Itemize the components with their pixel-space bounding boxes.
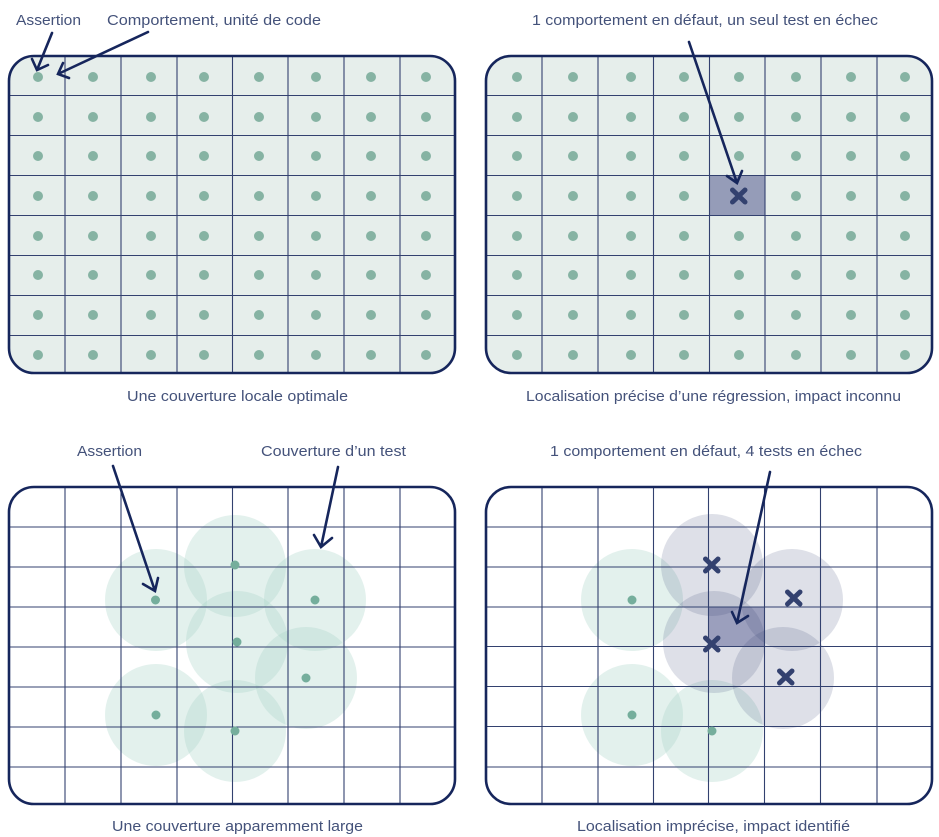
grid of code units [9,56,455,373]
failing cell highlight [710,176,765,216]
passing test circles [581,549,763,782]
failing test circles [661,514,843,729]
panel frame [486,487,932,804]
failing test crosses [706,559,800,683]
panel: localisation précise [486,12,932,405]
label: comportement: Comportement, unité de code [107,12,321,29]
panel frame [9,487,455,804]
panel: localisation imprécise [486,443,932,835]
test coverage circles [105,515,366,782]
label: assertion: Assertion [16,12,81,29]
caption: Localisation précise d’une régression, impact inconnu [526,388,901,405]
label: 4 tests en échec: 1 comportement en défaut, 4 tests en échec [550,443,863,460]
assertion dots [38,77,426,355]
panel frame [9,56,455,373]
arrow: assertion [32,33,52,70]
panel background [9,56,455,373]
grid of code units [9,487,455,804]
arrow: vers la cellule en défaut [732,472,770,623]
grid of code units [486,487,932,804]
panel background [486,56,932,373]
arrow: assertion [113,466,158,591]
caption: Localisation imprécise, impact identifié [577,818,850,835]
caption: Une couverture locale optimale [127,388,348,405]
label: un seul test en échec: 1 comportement en défaut, un seul test en échec [532,12,879,29]
label: couverture d'un test: Couverture d’un test [261,443,407,460]
panel: couverture locale optimale [9,12,455,405]
assertion dots [517,77,905,355]
assertion dots [156,565,315,731]
grid of code units [486,56,932,373]
assertion dots [632,600,712,731]
panel frame [486,56,932,373]
caption: Une couverture apparemment large [112,818,363,835]
failing test cross [732,190,745,202]
arrow: vers la cellule en défaut [689,42,742,183]
panel: couverture apparemment large [9,443,455,835]
arrow: couverture d'un test [314,467,338,547]
arrow: comportement [58,32,148,78]
label: assertion: Assertion [77,443,142,460]
failing cell highlight [709,607,765,647]
